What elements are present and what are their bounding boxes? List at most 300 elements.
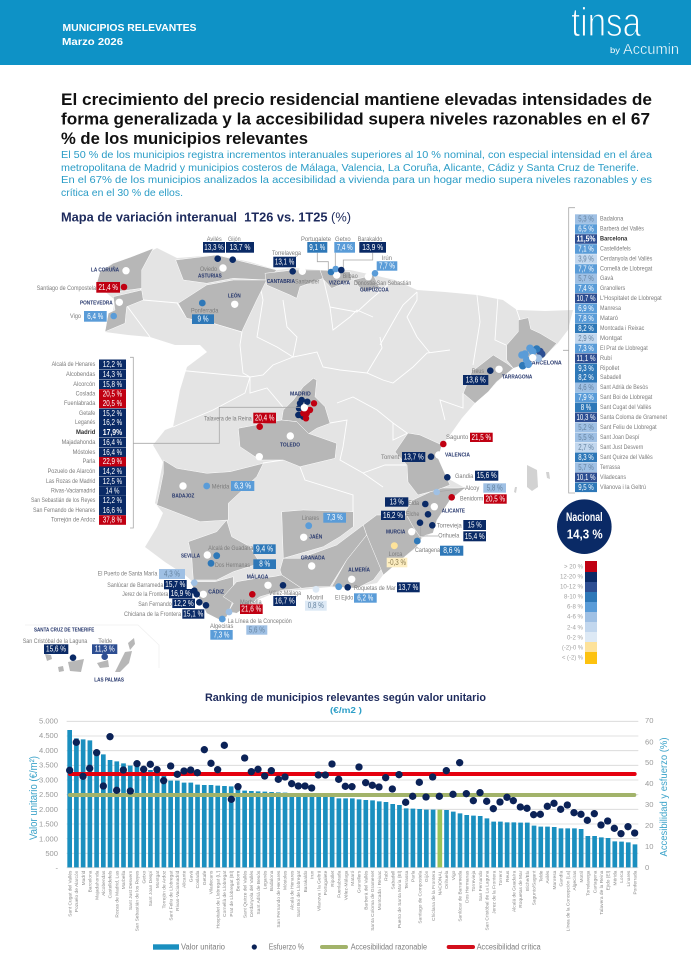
- label: Gijón: 13,7 %: [230, 243, 250, 252]
- map base shape: [97, 248, 573, 618]
- category labels: Rubí: [384, 870, 390, 881]
- label: Vélez-Málaga: 16,7 %: [275, 596, 295, 606]
- row: Cornellà de Llobregat: 7,7 %: [578, 264, 594, 274]
- label: Algeciras: [210, 616, 233, 640]
- label: Torrent: [381, 452, 434, 462]
- label: Getxo: 7,4 %: [337, 243, 353, 252]
- map colour legend: 8-10 %: [564, 594, 583, 600]
- label: Telde: [92, 638, 117, 660]
- category labels: Jerez de la Frontera: [491, 870, 497, 914]
- row: Ripollet: [575, 364, 619, 373]
- row: Torrejón de Ardoz: [51, 515, 126, 525]
- label: Lorca: Lorca: [389, 551, 403, 558]
- province labels: GUIPÚZCOA: [360, 286, 389, 293]
- map colour legend: < (-2) %: [562, 654, 583, 662]
- row: San Fernando de Henares: [33, 506, 126, 515]
- label: Lorca: -0,3 %: [388, 558, 406, 567]
- label: Alcalá de Guadaíra: 9,4 %: [256, 545, 273, 554]
- capital dots: [116, 264, 503, 598]
- category labels: Avilés: [545, 870, 551, 883]
- map colour legend: 6-8 %: [567, 604, 583, 610]
- chart legend: Accesibilidad crítica: [477, 943, 541, 952]
- map colour legend: 0-2 %: [567, 634, 583, 642]
- label: Roquetas de Mar: Roquetas de Mar: [354, 585, 396, 592]
- category labels: Dos Hermanas: [464, 870, 470, 903]
- panel: Barcelona municipalities list: [563, 208, 667, 493]
- row: Rubí: Rubí: [600, 355, 612, 362]
- label: Vélez-Málaga: [269, 582, 301, 606]
- label: Dos Hermanas: [208, 559, 276, 569]
- row: Gavà: [575, 274, 614, 283]
- row: Manresa: [575, 304, 621, 313]
- province labels: CANTABRIA: [267, 279, 295, 285]
- label: Vigo: Vigo: [70, 313, 81, 320]
- category labels: Sant Quirze del Vallès: [242, 870, 248, 918]
- row: Leganés: 16,2 %: [103, 418, 122, 427]
- row: Mataró: Mataró: [600, 315, 618, 322]
- category labels: Sant Just Desvern: [128, 870, 134, 910]
- right axis: 20: [645, 821, 653, 830]
- province labels: LA CORUÑA: [91, 267, 119, 274]
- category labels: Rivas-Vaciamadrid: [175, 870, 181, 911]
- row: Alcalá de Henares: Alcalá de Henares: [52, 361, 95, 368]
- row: Las Rozas de Madrid: Las Rozas de Madrid: [46, 478, 96, 485]
- label: Barakaldo: [338, 236, 386, 273]
- row: Getafe: [79, 408, 126, 418]
- label: Talavera de la Reina: [204, 413, 276, 430]
- category labels: Marbella: [121, 870, 127, 889]
- row: El Prat de Llobregat: 7,3 %: [578, 344, 594, 353]
- label: Telde: Telde: [98, 638, 113, 645]
- row: Sant Joan Despí: [575, 432, 639, 442]
- national value callout: 14,3 %: [567, 526, 603, 542]
- chart legend: Valor unitario: [181, 943, 226, 952]
- row: Sant Quirze del Vallès: Sant Quirze del Vallès: [600, 454, 653, 461]
- row: Cerdanyola del Vallès: Cerdanyola del Vallès: [600, 256, 652, 262]
- label: El Ejido: 6,2 %: [357, 594, 373, 602]
- row: Sant Feliu de Llobregat: [575, 422, 657, 432]
- row: San Sebastián de los Reyes: 12,2 %: [103, 496, 122, 505]
- row: Montgat: 2,9 %: [578, 334, 594, 343]
- row: Santa Coloma de Gramenet: Santa Coloma de Gramenet: [600, 414, 667, 421]
- category labels: Leganés: [262, 870, 268, 889]
- row: Alcobendas: [66, 370, 126, 379]
- category labels: Majadahonda: [94, 870, 100, 900]
- category labels: Barcelona: [88, 870, 94, 892]
- category labels: Montgat: [155, 870, 161, 888]
- main title: El crecimiento del precio residencial mantiene elevadas intensidades de: [61, 91, 652, 109]
- category labels: Castelldefels: [108, 870, 114, 898]
- row: Sant Just Desvern: Sant Just Desvern: [600, 444, 644, 451]
- right axis: 0: [645, 863, 649, 872]
- label: Sanlúcar de Barrameda: [107, 580, 198, 594]
- label: Alcoy: [433, 483, 506, 495]
- row: Montgat: [575, 334, 622, 343]
- row: Granollers: 7,4 %: [578, 284, 594, 293]
- label: Benidorm: 20,5 %: [486, 494, 505, 504]
- label: Elche: 16,2 %: [383, 511, 403, 520]
- province labels: SEVILLA: [181, 554, 200, 560]
- intro paragraph: En el 67% de los municipios analizados la accesibilidad a vivienda para un hogar medio supera niveles razonables y es: [61, 174, 652, 186]
- intro paragraph: crítica en el 30 % de ellos.: [61, 187, 183, 199]
- label: Roquetas de Mar: 13,7 %: [398, 583, 418, 592]
- row: Gavà: Gavà: [600, 275, 614, 282]
- category labels: Torrevieja: [471, 870, 477, 892]
- label: Motril: Motril: [307, 594, 323, 602]
- label: Barakaldo: Barakaldo: [358, 236, 383, 243]
- left axis: 500: [45, 849, 58, 858]
- row: Barberà del Vallès: 6,5 %: [578, 224, 594, 234]
- row: Fuenlabrada: [64, 398, 126, 408]
- row: Santa Coloma de Gramenet: [575, 412, 667, 422]
- label: Ponferrada: 9 %: [198, 315, 208, 324]
- row: Parla: [83, 457, 126, 466]
- label: El Puerto de Santa María: El Puerto de Santa María: [98, 570, 158, 578]
- category labels: Benidorm: [236, 871, 242, 891]
- row: Barberà del Vallès: Barberà del Vallès: [600, 226, 644, 232]
- row: Ripollet: 9,3 %: [578, 364, 594, 373]
- row: San Sebastián de los Reyes: San Sebastián de los Reyes: [31, 497, 95, 504]
- label: Jerez de la Frontera: Jerez de la Frontera: [122, 591, 169, 598]
- row: San Fernando de Henares: San Fernando de Henares: [33, 507, 95, 514]
- line: accesibilidad crítica: [68, 772, 637, 776]
- category labels: Vélez-Málaga: [343, 870, 349, 900]
- label: Bilbao: Bilbao: [343, 273, 358, 280]
- province labels: TARRAGONA: [502, 374, 532, 380]
- map colour legend: > 20 %: [564, 564, 583, 570]
- category labels: Ejido (El): [606, 870, 612, 890]
- label: San Cristóbal de la Laguna: San Cristóbal de la Laguna: [23, 638, 88, 645]
- row: Rivas-Vaciamadrid: Rivas-Vaciamadrid: [51, 488, 96, 494]
- label: Mérida: 6,3 %: [234, 482, 251, 490]
- logo: tinsa by Accumin: [571, 0, 679, 58]
- map colour legend: [560, 561, 597, 664]
- label: Avilés: [203, 236, 225, 262]
- label: San Cristóbal de la Laguna: [23, 638, 88, 661]
- row: Sant Just Desvern: [575, 442, 644, 452]
- province labels: BADAJOZ: [172, 494, 195, 500]
- category labels: Puerto de Santa María (El): [397, 870, 403, 928]
- category labels: Lorca: [619, 870, 625, 883]
- label: Portugalete: [301, 236, 334, 275]
- map colour legend: 12-20 %: [560, 574, 583, 580]
- label: Algeciras: 7,3 %: [214, 630, 230, 639]
- label: Roquetas de Mar: [344, 582, 420, 592]
- category labels: Prat de Llobregat (El): [229, 870, 235, 917]
- row: Madrid: 17,9%: [103, 428, 122, 437]
- label: Sagunto: 21,5 %: [472, 433, 491, 442]
- row: Terrassa: Terrassa: [600, 464, 620, 471]
- label: Ponferrada: [191, 300, 219, 324]
- header title: MUNICIPIOS RELEVANTES: [62, 22, 196, 34]
- label: Alcoy: Alcoy: [465, 485, 480, 492]
- left axis: 3.500: [39, 761, 58, 770]
- label: Linares: 7,3 %: [327, 513, 343, 522]
- label: Benidorm: [448, 494, 507, 504]
- category labels: Santa Coloma de Gramenet: [370, 870, 376, 931]
- label: Gandia: 15,6 %: [477, 471, 497, 480]
- label: Reus: [463, 367, 494, 385]
- row: Móstoles: [73, 448, 126, 457]
- highlighted provinces: [97, 248, 557, 620]
- right axis title: Accesibilidad y esfuerzo (%): [658, 738, 670, 856]
- row: Viladecans: 10,1 %: [576, 473, 596, 482]
- row: San Sebastián de los Reyes: [31, 496, 126, 506]
- row: Cornellà de Llobregat: Cornellà de Llobregat: [600, 266, 652, 272]
- province labels: PONTEVEDRA: [80, 300, 113, 306]
- right axis: 60: [645, 738, 653, 746]
- row: Montcada i Reixac: 8,2 %: [578, 324, 594, 333]
- map colour legend: (-2)-0 %: [562, 644, 583, 652]
- label: Chiclana de la Frontera: [124, 602, 209, 619]
- row: Majadahonda: 16,4 %: [103, 438, 122, 447]
- intro paragraph: El 50 % de los municipios registra incrementos interanuales superiores al 10 % nominal, con especial intensidad en el área: [61, 149, 652, 161]
- right axis: 40: [645, 779, 653, 788]
- label: Sagunto: [440, 433, 493, 447]
- label: Vélez-Málaga: Vélez-Málaga: [269, 590, 301, 597]
- category labels: Irun: [310, 870, 316, 879]
- row: Badalona: 5,3 %: [578, 214, 594, 224]
- left axis: 1.000: [39, 834, 58, 843]
- category labels: Chiclana de la Frontera: [431, 870, 437, 921]
- category labels: [67, 870, 639, 931]
- row: Rubí: 11,1 %: [576, 354, 596, 363]
- label: Elche: Elche: [406, 511, 420, 518]
- row: Castelldefels: 7,1 %: [578, 244, 594, 254]
- national value callout: Nacional: [566, 512, 603, 524]
- map colour legend: 10-12 %: [560, 584, 583, 590]
- label: El Ejido: El Ejido: [335, 594, 354, 602]
- category labels: Vigo: [451, 870, 457, 880]
- row: Granollers: Granollers: [600, 285, 625, 292]
- label: Torrent: 13,7 %: [404, 452, 424, 462]
- row: Rivas-Vaciamadrid: 14 %: [106, 486, 120, 496]
- label: Santiago de Compostela: [37, 282, 127, 293]
- category labels: Barakaldo: [303, 870, 309, 892]
- category labels: Mataró: [350, 870, 356, 886]
- header title: Marzo 2026: [62, 36, 123, 48]
- row: Alcorcón: 15,8 %: [103, 380, 122, 389]
- row: Alcalá de Henares: [52, 360, 126, 369]
- row: Coslada: Coslada: [76, 390, 96, 398]
- province labels: CÁDIZ: [208, 589, 225, 596]
- row: Vilanova i la Geltrú: Vilanova i la Geltrú: [600, 484, 646, 491]
- row: Montgat: Montgat: [600, 335, 622, 342]
- label: Alcalá de Guadaíra: Alcalá de Guadaíra: [208, 545, 254, 552]
- label: Torrent: Torrent: [381, 454, 400, 461]
- row: L'Hospitalet de Llobregat: [575, 294, 662, 303]
- row: Manresa: 6,9 %: [578, 304, 594, 313]
- category labels: Sabadell: [390, 871, 396, 889]
- chart heading: Ranking de municipios relevantes según valor unitario: [205, 692, 486, 704]
- label: Torrelavega: 13,1 %: [275, 258, 294, 266]
- row: Sant Adrià de Besòs: [575, 382, 648, 392]
- row: Cerdanyola del Vallès: 3,9 %: [578, 254, 594, 264]
- label: Reus: Reus: [472, 368, 484, 375]
- line: accesibilidad razonable: [68, 793, 636, 797]
- right axis: 50: [645, 758, 653, 767]
- logo: tinsa by Accumin: Accumin: [623, 41, 679, 58]
- label: Chiclana de la Frontera: Chiclana de la Frontera: [124, 611, 181, 618]
- right axis: 10: [645, 842, 653, 851]
- category labels: Santiago de Compostela: [417, 870, 423, 924]
- label: Torrelavega: Torrelavega: [272, 250, 301, 257]
- label: Linares: [302, 513, 346, 529]
- row: Pozuelo de Alarcón: Pozuelo de Alarcón: [48, 468, 96, 475]
- category labels: Vilanova i la Geltrú: [316, 870, 322, 911]
- label: Chiclana de la Frontera: 15,1 %: [183, 610, 203, 618]
- row: Alcobendas: 14,3 %: [103, 370, 122, 379]
- label: Cartagena: [414, 538, 463, 556]
- left axis: 4.000: [39, 746, 58, 755]
- province labels: LEÓN: [228, 292, 241, 300]
- row: Vilanova i la Geltrú: [575, 482, 646, 492]
- category labels: Reus: [505, 870, 511, 882]
- row: Getafe: 15,2 %: [103, 409, 122, 418]
- row: Gavà: 5,7 %: [578, 274, 594, 283]
- category labels: Getxo: [141, 870, 147, 884]
- category labels: Sanlúcar de Barrameda: [458, 870, 464, 922]
- category labels: Montcada i Reixac: [377, 870, 383, 910]
- province labels: ASTURIAS: [198, 274, 222, 280]
- row: Mataró: [575, 314, 618, 323]
- left axis: 3.000: [39, 775, 58, 784]
- label: Elda: [385, 497, 429, 507]
- intro paragraph: metropolitana de Madrid y municipios costeros de Málaga, Valencia, La Coruña, Alicante, Cádiz y Santa Cruz de Tenerife.: [61, 162, 639, 174]
- label: El Puerto de Santa María: [98, 569, 198, 586]
- category labels: Roquetas de Mar: [518, 870, 524, 908]
- category labels: Torrelavega: [586, 870, 592, 896]
- category labels: Algeciras: [572, 870, 578, 891]
- label: Avilés: Avilés: [207, 236, 222, 243]
- category labels: Portugalete: [323, 870, 329, 895]
- plot: [66, 721, 639, 931]
- chart legend: Esfuerzo %: [269, 943, 304, 952]
- row: Alcalá de Henares: 12,2 %: [103, 360, 122, 369]
- category labels: Orihuela: [444, 870, 450, 889]
- row: Majadahonda: Majadahonda: [62, 439, 96, 446]
- label: Dos Hermanas: Dos Hermanas: [215, 562, 250, 569]
- province labels: MADRID: [290, 392, 311, 398]
- label: Santiago de Compostela: 21,4 %: [98, 283, 118, 292]
- panel: Canary Islands inset: [23, 625, 159, 672]
- label: Talavera de la Reina: Talavera de la Reina: [204, 416, 252, 422]
- label: Gandia: Gandia: [455, 473, 474, 480]
- label: Motril: [305, 586, 327, 611]
- province labels: ALICANTE: [442, 509, 465, 515]
- label: Orihuela: [417, 519, 486, 541]
- category labels: San Fernando de Henares: [276, 870, 282, 928]
- category labels: Granollers: [357, 870, 363, 893]
- left axis: 5.000: [39, 716, 58, 726]
- category labels: Elche/Elx: [525, 870, 531, 891]
- category labels: Rozas de Madrid, Las: [114, 870, 120, 918]
- row: Ripollet: Ripollet: [600, 365, 619, 372]
- row: Las Rozas de Madrid: [46, 476, 126, 486]
- row: Móstoles: Móstoles: [73, 449, 95, 456]
- row: Sant Feliu de Llobregat: Sant Feliu de Llobregat: [600, 424, 657, 431]
- category labels: San Cristóbal de La Laguna: [485, 870, 491, 931]
- category labels: Sant Cugat del Vallès: [67, 870, 73, 917]
- province labels: LAS PALMAS: [94, 678, 124, 684]
- row: Sant Quirze del Vallès: [575, 452, 653, 462]
- dots: esfuerzo: [66, 733, 638, 837]
- category labels: Gandía: [559, 870, 565, 887]
- row: Getafe: Getafe: [79, 410, 96, 417]
- map section heading: Mapa de variación interanual 1T26 vs. 1T25 (%): [61, 210, 351, 224]
- row: Fuenlabrada: 20,5 %: [103, 399, 122, 408]
- row: Viladecans: [575, 472, 626, 482]
- row: Sant Just Desvern: 2,7 %: [578, 443, 594, 452]
- label: Elda: 13 %: [390, 498, 404, 506]
- category labels: Coslada: [195, 870, 201, 888]
- row: Cerdanyola del Vallès: [575, 254, 652, 264]
- label: Linares: Linares: [302, 515, 319, 522]
- category labels: Parla: [411, 870, 417, 882]
- label: La Línea de la Concepción: 5,6 %: [249, 626, 265, 634]
- category labels: Barberà del Vallès: [363, 870, 369, 910]
- label: Lorca: [387, 542, 407, 567]
- category labels: Sant Feliu de Llobregat: [168, 870, 174, 921]
- label: Barakaldo: 13,9 %: [362, 243, 383, 252]
- row: Sant Feliu de Llobregat: 5,2 %: [578, 423, 594, 432]
- category labels: Alcalá de Henares: [289, 870, 295, 910]
- row: Sabadell: [575, 373, 621, 382]
- label: Irún: 7,7 %: [379, 262, 395, 270]
- left axis: 2.000: [39, 805, 58, 814]
- label: La Línea de la Concepción: La Línea de la Concepción: [228, 618, 292, 625]
- row: Mataró: 7,8 %: [578, 314, 594, 323]
- row: Leganés: [75, 418, 126, 428]
- category labels: Móstoles: [283, 870, 289, 890]
- left axis: [39, 716, 58, 872]
- label: Marbella: Marbella: [240, 599, 262, 606]
- row: L'Hospitalet de Llobregat: 10,7 %: [576, 294, 596, 303]
- row: Alcorcón: [73, 380, 126, 389]
- row: Torrejón de Ardoz: Torrejón de Ardoz: [51, 516, 95, 524]
- category labels: Madrid: [81, 870, 87, 885]
- label: El Ejido: [335, 583, 377, 603]
- Madrid metro dot cluster: [295, 397, 317, 421]
- row: San Fernando de Henares: 16,6 %: [103, 506, 122, 515]
- province labels: GRANADA: [301, 556, 325, 562]
- province labels: MURCIA: [386, 529, 405, 535]
- Barcelona metro dot cluster: BARCELONA: [528, 360, 562, 366]
- label: Gijón: [226, 236, 254, 263]
- category labels: Torrent: [498, 870, 504, 886]
- label: Elda: Elda: [408, 500, 419, 507]
- category labels: Línea de la Concepción (La): [565, 870, 571, 931]
- category labels: Terrassa: [404, 870, 410, 889]
- right axis: [645, 716, 653, 872]
- category labels: San Sebastián de los Reyes: [135, 870, 141, 931]
- right axis: 70: [645, 716, 653, 725]
- category labels: Alicante: [182, 870, 188, 888]
- category labels: Cornellà de Llobregat: [222, 870, 228, 917]
- province labels: VALENCIA: [445, 453, 470, 459]
- label: Torrevieja: 15 %: [468, 520, 482, 530]
- header banner: [0, 0, 691, 65]
- row: Sant Joan Despí: 5,5 %: [578, 433, 594, 442]
- row: Barcelona: 11,5%: [576, 234, 596, 244]
- category labels: Ponferrada: [633, 870, 639, 895]
- category labels: Torrejón de Ardoz: [162, 870, 168, 909]
- label: Elche: [381, 511, 431, 520]
- label: Sanlúcar de Barrameda: 15,7 %: [165, 580, 185, 589]
- row: Viladecans: Viladecans: [600, 474, 626, 481]
- label: Vigo: 6,4 %: [87, 312, 103, 321]
- row: El Prat de Llobregat: El Prat de Llobregat: [600, 345, 648, 352]
